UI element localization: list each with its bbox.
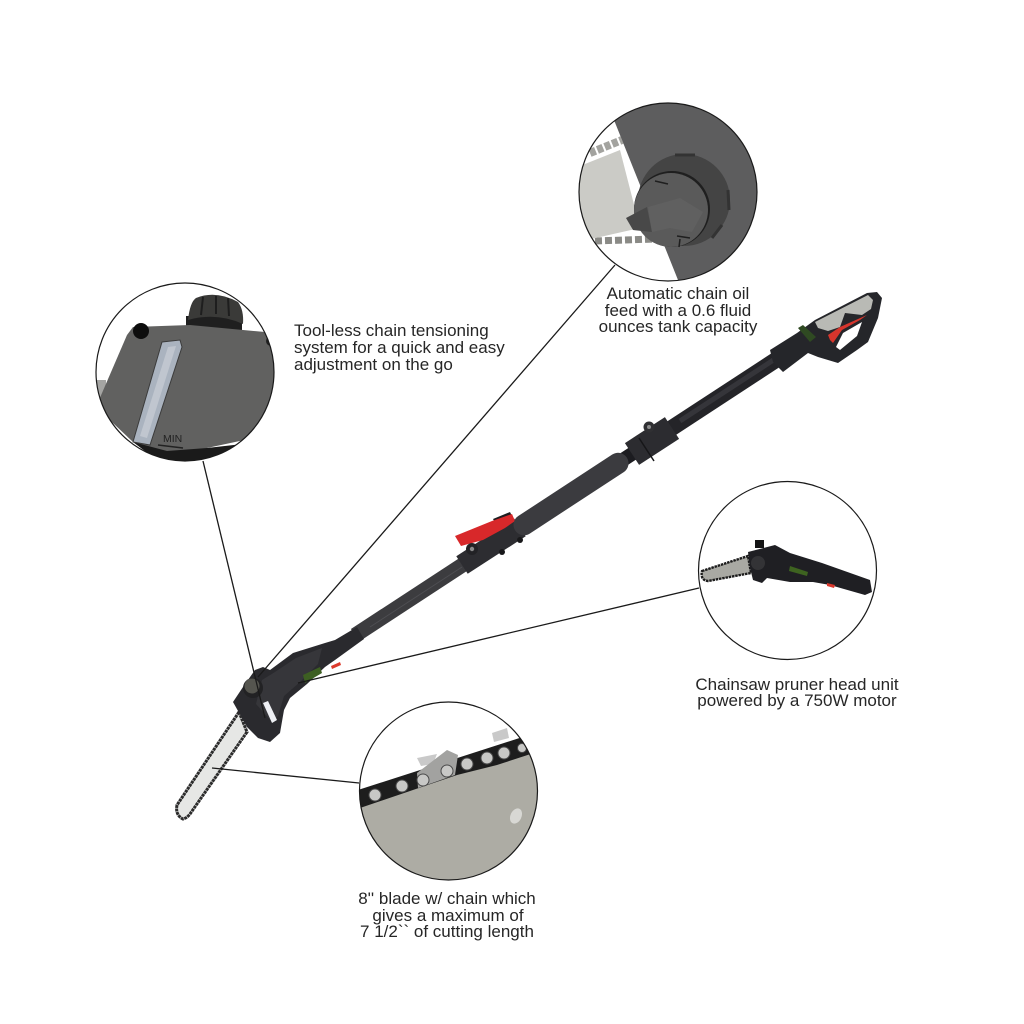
knob neck — [186, 316, 242, 330]
circle: blade and chain close-up — [358, 701, 538, 881]
mini green label — [789, 566, 808, 576]
caption: oil feed: feed with a 0.6 fluid — [605, 301, 751, 320]
lower tube highlight — [370, 567, 462, 627]
chain band — [352, 745, 532, 803]
handle red trigger — [828, 315, 867, 343]
mini body — [748, 545, 872, 595]
lever latch — [493, 512, 513, 526]
caption: head unit: powered by a 750W motor — [697, 691, 897, 710]
saw blade bar with chain — [177, 712, 247, 819]
chain rivets — [369, 744, 526, 801]
dial handle wing — [626, 207, 652, 232]
head lighter face — [256, 648, 322, 722]
foam grip — [524, 463, 618, 525]
circle outline — [698, 482, 876, 660]
knob top — [244, 678, 260, 694]
screw hole — [133, 323, 149, 339]
housing — [614, 104, 756, 280]
dial ring notches — [675, 155, 729, 238]
rear handle — [770, 292, 882, 372]
rivet 8 — [518, 744, 526, 752]
product: chainsaw pole pruner — [177, 292, 882, 819]
red safety button — [331, 662, 341, 669]
circle background — [698, 482, 876, 660]
upper chain — [590, 140, 622, 153]
caption: blade: 8'' blade w/ chain which — [358, 889, 536, 908]
caption: oil feed: ounces tank capacity — [599, 317, 758, 336]
circle: pruner head unit — [698, 482, 876, 660]
circle outline — [579, 103, 757, 281]
silver chain piece — [97, 380, 106, 398]
grey blade — [362, 754, 537, 880]
handle grey top — [815, 295, 873, 331]
knob — [188, 295, 243, 324]
caption: blade: gives a maximum of — [372, 906, 524, 925]
blade — [580, 150, 634, 238]
rivet 2 — [396, 780, 408, 792]
caption: tensioning: Tool-less chain tensioning — [294, 321, 489, 340]
caption: blade: 7 1/2`` of cutting length — [360, 922, 534, 941]
pivot bolt centre — [470, 547, 474, 551]
rivet 3 — [417, 774, 429, 786]
sight window — [133, 340, 182, 445]
handle green label — [798, 325, 816, 342]
close-up photo — [96, 295, 278, 470]
head housing — [233, 627, 364, 742]
circle background — [579, 103, 757, 281]
close-up photo — [360, 728, 537, 880]
collar ring line — [639, 438, 654, 461]
leader to tensioning circle — [203, 461, 265, 718]
dial handle body — [648, 198, 703, 232]
red lever — [455, 514, 515, 546]
circle: tool-less tensioning close-up — [96, 283, 278, 470]
MIN mark: MIN — [163, 433, 182, 445]
dial outer ring — [638, 154, 730, 246]
oil window — [263, 701, 277, 723]
dial disc — [634, 173, 708, 247]
circle: oil tank cap close-up — [578, 102, 758, 282]
mini knob — [755, 540, 764, 548]
lever pivot — [466, 543, 478, 555]
MIN underline — [158, 445, 183, 448]
caption: head unit: Chainsaw pruner head unit — [695, 675, 899, 694]
dial black gap — [634, 171, 710, 247]
silver link — [417, 750, 458, 788]
tension knob — [243, 678, 263, 698]
clamp bolt 2 — [517, 537, 523, 543]
clamp bolts — [499, 537, 523, 555]
window highlight — [140, 346, 176, 438]
rivet 7 — [498, 747, 510, 759]
collar knob body — [644, 422, 654, 432]
caption: tensioning: system for a quick and easy — [294, 338, 505, 357]
mini blade and chain — [702, 556, 751, 581]
body shadow — [134, 442, 236, 460]
rivet 6 — [481, 752, 493, 764]
screw hole right — [266, 338, 270, 346]
collar knob centre — [647, 425, 651, 429]
circle background — [96, 283, 274, 461]
lower tube — [355, 564, 464, 635]
middle tube — [612, 447, 642, 467]
mini wheel — [751, 556, 765, 570]
leader lines — [203, 265, 699, 783]
cutter tooth right — [492, 728, 509, 742]
grey body — [96, 325, 277, 451]
leader to head unit circle — [298, 588, 699, 683]
lower chain — [595, 239, 655, 241]
mini red button — [827, 583, 835, 588]
collar knob — [644, 422, 654, 432]
circle outline — [360, 702, 538, 880]
telescopic collar — [632, 428, 672, 454]
close-up photo — [580, 104, 756, 280]
caption: oil feed: Automatic chain oil — [607, 284, 749, 303]
mini chainsaw — [702, 540, 872, 595]
caption: tensioning: adjustment on the go — [294, 355, 453, 374]
rivet 1 — [369, 789, 381, 801]
leader to oil feed circle — [258, 265, 615, 677]
blade hole — [508, 806, 524, 826]
handle opening — [836, 322, 862, 350]
cutter tooth — [417, 754, 437, 766]
circle background — [360, 702, 538, 880]
rivet 5 — [461, 758, 473, 770]
clamp bolt 1 — [499, 549, 505, 555]
tube highlight — [680, 359, 775, 421]
upper tube — [668, 359, 778, 430]
knob ridges — [201, 296, 229, 316]
rivet 4 — [441, 765, 453, 777]
leader to blade circle — [212, 768, 359, 783]
green brand label — [303, 667, 322, 683]
knob ring — [243, 678, 263, 698]
pivot bolt — [466, 543, 478, 555]
clamp collar — [462, 527, 520, 565]
dial symbols — [655, 181, 690, 247]
circle outline — [96, 283, 274, 461]
